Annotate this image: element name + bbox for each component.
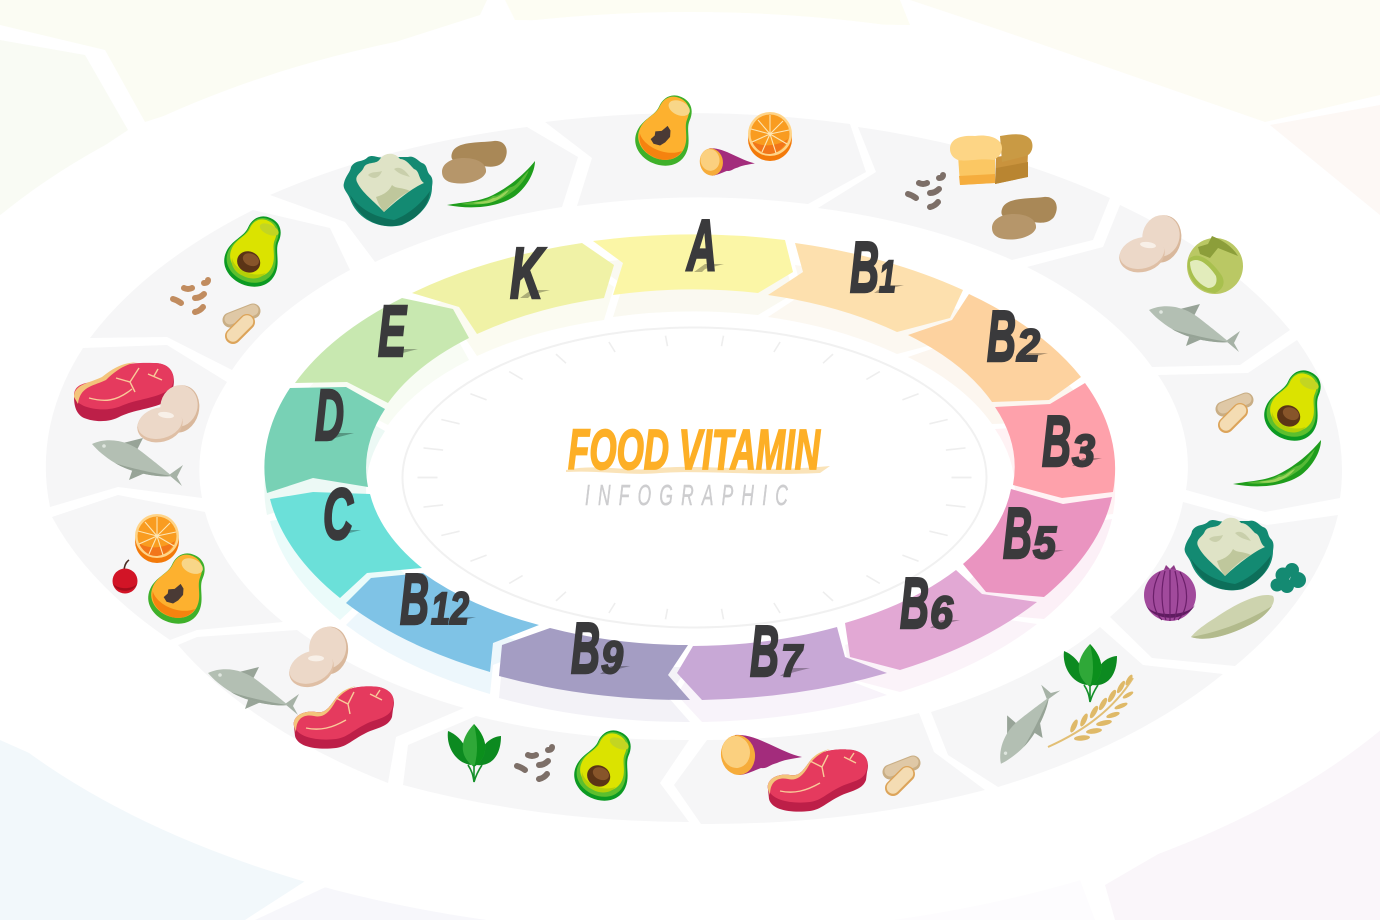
icon: sweet potato (698, 147, 755, 177)
segment: vitamin B7 (677, 627, 887, 700)
label: B7: B (750, 612, 779, 692)
icon: pea pod (1233, 440, 1321, 486)
icon: potatoes (992, 197, 1057, 240)
food cluster: vitamin B1 (908, 134, 1057, 240)
label: B12: B (400, 560, 429, 640)
label: E: E (378, 292, 407, 372)
icon: beans (908, 175, 943, 207)
icon: avocado (217, 207, 295, 295)
icon: avocado (1257, 361, 1335, 449)
centre dial: thin ellipse with ticks (402, 328, 986, 628)
chart: vitamin ring segments (264, 234, 1115, 700)
segment: vitamin B6 (845, 570, 1037, 670)
segment: vitamin B12 (346, 573, 539, 672)
icon: potatoes (442, 141, 507, 184)
label: D: D (315, 376, 344, 456)
icon: meat (74, 362, 174, 421)
icon: eggs (134, 381, 205, 447)
food cluster: vitamin B3 (1223, 361, 1335, 486)
icon: meat (768, 749, 868, 812)
segment: vitamin A (593, 234, 793, 295)
label: K: K (510, 234, 546, 314)
icon: papaya (628, 86, 706, 174)
sector: E foods (90, 210, 350, 370)
label: B7: 7 (781, 635, 804, 686)
icon: leaves (448, 724, 501, 782)
segment: vitamin K (412, 243, 614, 334)
icon: leaves (1064, 644, 1117, 702)
label: B3: 3 (1072, 425, 1095, 476)
icon: pea pod (447, 161, 535, 207)
icon: wheat (1048, 674, 1134, 747)
label: B3: B (1042, 402, 1071, 482)
label: B12 (400, 560, 476, 640)
icon: peanut (230, 310, 253, 336)
label: C: C (323, 475, 354, 555)
icon: peanut (1223, 399, 1246, 425)
icon: cauliflower (344, 154, 432, 226)
title: FOOD VITAMIN (566, 418, 830, 482)
sector: B12 foods (178, 630, 464, 783)
icon: sweet potato (718, 733, 802, 777)
icon: papaya (141, 544, 219, 632)
sector: C foods (52, 495, 283, 640)
label: A (686, 206, 724, 286)
food cluster: vitamin B2 (1116, 211, 1243, 352)
icon: fish (995, 679, 1061, 773)
icon: peanut (890, 762, 913, 788)
sector: B3 foods (1158, 340, 1342, 512)
sector: K foods (270, 127, 578, 262)
food cluster: vitamin K (344, 141, 535, 226)
food cluster: vitamin A (628, 86, 792, 177)
label: B2: B (987, 297, 1016, 377)
segment: vitamin E (295, 298, 469, 403)
icon: beans (173, 280, 208, 312)
sector: A foods (545, 113, 866, 206)
food cluster: vitamin B5 (1144, 518, 1306, 639)
food cluster: vitamin E (173, 207, 295, 336)
icon: fish (208, 667, 299, 715)
label: B1: 1 (879, 251, 896, 302)
sector: B6 foods (931, 627, 1223, 787)
icon: cauliflower (1185, 518, 1274, 590)
sector: B2 foods (1027, 205, 1290, 367)
food cluster: vitamin B9 (448, 721, 645, 809)
icon: fish (92, 438, 183, 486)
label: B5: 5 (1033, 517, 1057, 568)
icon: eggs (279, 619, 359, 695)
icon: cherry (112, 560, 138, 594)
icon: daikon (1191, 563, 1306, 639)
panel: grey food sectors ring (46, 113, 1342, 824)
food cluster: vitamin B7 (718, 733, 913, 812)
icon: onion (1144, 565, 1196, 621)
segment: vitamin D (264, 387, 385, 493)
icon: orange (135, 514, 179, 563)
segment: vitamin B2 (908, 294, 1081, 402)
icon: meat (294, 686, 394, 749)
icon: fish (1149, 304, 1240, 352)
food cluster: vitamin B12 (208, 619, 394, 749)
label: B5: B (1003, 494, 1032, 574)
segment: vitamin B1 (768, 243, 963, 332)
food cluster: vitamin B6 (995, 644, 1134, 773)
icon: eggs (1116, 211, 1187, 277)
sector: B7 foods (674, 713, 985, 824)
label: B9: 9 (601, 632, 623, 683)
subtitle: INFOGRAPHIC: INFOGRAPHIC (585, 480, 788, 512)
label: B6: 6 (930, 587, 954, 638)
sector: B5 foods (1110, 502, 1338, 666)
icon: bread (950, 134, 1032, 185)
segment: vitamin B9 (499, 628, 690, 700)
segment: vitamin B3 (995, 383, 1115, 498)
sector: B1 foods (818, 127, 1110, 260)
segment: vitamin C (270, 492, 422, 598)
food cluster: vitamin C (112, 514, 219, 632)
label: B6: B (900, 564, 929, 644)
icon: avocado (567, 721, 645, 809)
icon: beans (517, 747, 552, 779)
label: B12: 12 (431, 583, 469, 634)
icon: kohlrabi (1187, 236, 1243, 294)
food cluster: vitamin D (74, 362, 205, 486)
sector: D foods (46, 345, 227, 507)
label: B9: B (571, 609, 600, 689)
labels: vitamin letters (315, 206, 1102, 692)
label: A: A (686, 206, 717, 286)
icon: orange (748, 112, 792, 161)
title: FOOD VITAMIN: FOOD VITAMIN (568, 418, 821, 482)
segment: vitamin B5 (963, 489, 1112, 597)
label: B2: 2 (1016, 320, 1040, 371)
sector: B9 foods (403, 716, 689, 822)
label: B1: B (850, 228, 879, 308)
